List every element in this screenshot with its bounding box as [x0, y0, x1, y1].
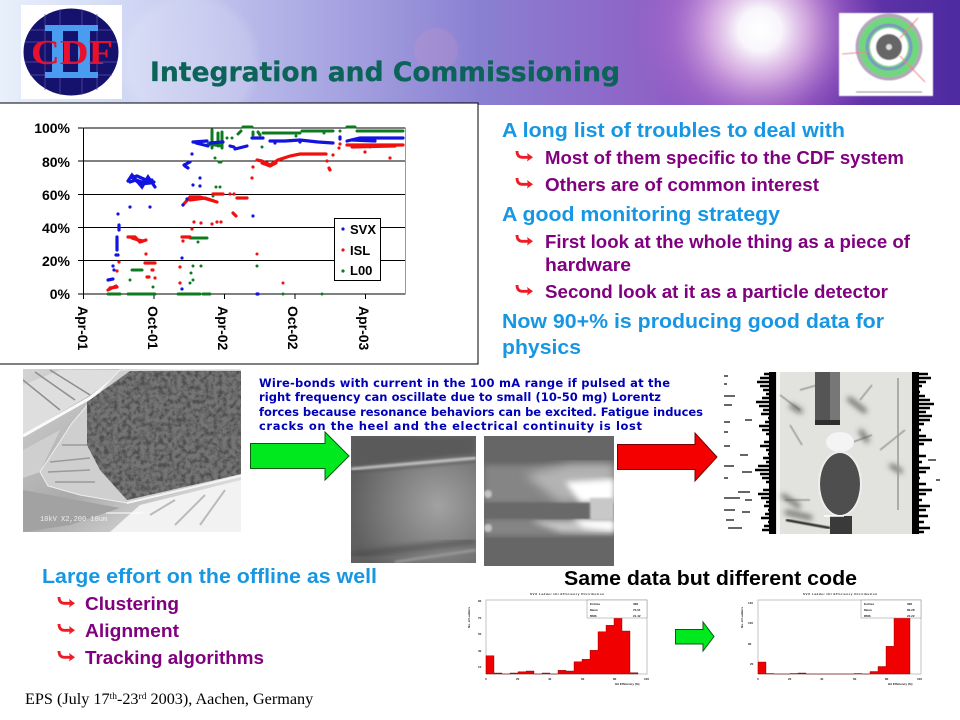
bullet arrow: [59, 597, 75, 608]
data series SVX: [108, 137, 403, 294]
text block: offline effort: Alignment: [85, 621, 179, 641]
detector cross-section image: [839, 13, 933, 96]
y axis labels: 80%: [42, 154, 71, 170]
histogram: before: 90: [478, 599, 482, 603]
photo: wire-bond fracture SEM: 10kV X2,200 10um: [40, 516, 107, 524]
histogram: before: 70: [478, 616, 482, 620]
photo: wire-bond resonating: [484, 436, 614, 566]
logo: CDF II: [21, 5, 122, 99]
histogram: before: 100: [644, 677, 649, 681]
histogram: after: No. of Ladders: [740, 607, 744, 628]
text block: troubles and monitoring: [502, 120, 911, 359]
x axis labels: [75, 306, 372, 351]
bullet arrow: [517, 178, 533, 188]
logo: CDF II: CDF: [31, 33, 113, 72]
histogram: after: [740, 592, 922, 686]
footer: rd: [139, 692, 147, 702]
histogram: before: Hit Efficiency (%): [615, 682, 640, 686]
x axis labels: Apr-03: [356, 306, 372, 351]
histogram: before: 40: [548, 677, 552, 681]
histogram: before: 10: [478, 665, 482, 669]
histogram: after: Entries: [864, 602, 875, 606]
text block: offline effort: Large effort on the offline as well: [42, 566, 377, 588]
y axis labels: 100%: [34, 120, 71, 136]
header banner: [0, 0, 960, 105]
histogram: after: SVX Ladder Hit Efficiency Distribution: [803, 592, 877, 596]
text block: troubles and monitoring: physics: [502, 337, 581, 359]
histogram: before: 60: [581, 677, 585, 681]
text block: troubles and monitoring: A good monitoring strategy: [502, 204, 781, 226]
panel: efficiency chart: [0, 103, 478, 364]
histogram: after: 80: [748, 642, 752, 646]
footer: 2003), Aachen, Germany: [146, 690, 314, 708]
y axis labels: [34, 120, 71, 302]
histogram: after: 100: [917, 677, 922, 681]
histogram: after: 20: [750, 662, 754, 666]
text block: wire-bond explanation: right frequency can oscillate due to small (10-50 mg) Lorentz: [259, 390, 661, 404]
bullet arrow: [517, 285, 533, 296]
data series ISL: [108, 144, 403, 290]
histogram: before: 398: [633, 602, 638, 606]
histogram: after: RMS: [864, 614, 871, 618]
bullet arrow: [517, 151, 533, 162]
x axis labels: Oct-02: [285, 306, 301, 350]
black edge right: [919, 372, 934, 534]
scratches and debris: [780, 380, 905, 500]
text block: offline effort: Clustering: [85, 594, 179, 614]
histogram: before: 80: [613, 677, 617, 681]
histogram: after: Hit Efficiency (%): [888, 682, 913, 686]
histogram: before: SVX Ladder Hit Efficiency Distribution: [530, 592, 604, 596]
photo: failed wire-bond: [724, 372, 944, 534]
histogram: after: 120: [748, 621, 753, 625]
text block: wire-bond explanation: Wire-bonds with current in the 100 mA range if pulsed at the: [259, 376, 670, 390]
x axis labels: Apr-02: [215, 306, 231, 351]
legend: ISL: [350, 243, 370, 258]
bullet arrow: [59, 651, 75, 662]
text block: wire-bond explanation: cracks on the heel and the electrical continuity is lost: [259, 419, 642, 433]
data series ISL outliers: [257, 254, 283, 283]
histogram: before: 30: [478, 649, 482, 653]
histogram: after: 80: [885, 677, 889, 681]
text block: wire-bond explanation: forces because resonance behaviors can be excited. Fatigue induces: [259, 405, 703, 419]
histogram: before: 70.01: [633, 608, 641, 612]
arrow: small green: [676, 622, 714, 651]
histogram: after: 22.22: [907, 614, 915, 618]
bullet arrow: [59, 624, 75, 634]
x axis labels: Apr-01: [75, 306, 91, 351]
text block: wire-bond explanation: [259, 376, 703, 433]
histogram: before: 50: [478, 632, 482, 636]
histogram: before: [467, 592, 649, 686]
text block: troubles and monitoring: Most of them specific to the CDF system: [545, 148, 904, 168]
histogram: before: 21.42: [633, 614, 641, 618]
photo: wire-bond before: [351, 436, 476, 563]
y axis labels: 60%: [42, 187, 71, 203]
histogram: before: Entries: [590, 602, 601, 606]
text block: troubles and monitoring: Now 90+% is producing good data for: [502, 311, 884, 333]
text block: troubles and monitoring: Others are of common interest: [545, 175, 819, 195]
histogram: after: 0: [757, 677, 759, 681]
text block: troubles and monitoring: A long list of troubles to deal with: [502, 120, 845, 142]
y axis labels: 40%: [42, 220, 71, 236]
text block: offline effort: [42, 566, 377, 668]
histogram: after: 398: [907, 602, 912, 606]
title: Integration and Commissioning: [150, 57, 620, 88]
histogram: before: Mean: [590, 608, 598, 612]
histogram: after: 60: [853, 677, 857, 681]
heading: same data: Same data but different code: [564, 568, 857, 590]
histogram: before: RMS: [590, 614, 597, 618]
legend: SVX: [350, 222, 376, 237]
histogram: after: 40: [820, 677, 824, 681]
footer: th: [110, 692, 117, 702]
histogram: after: Mean: [864, 608, 872, 612]
histogram: before: 20: [516, 677, 520, 681]
arrow: green: [250, 432, 349, 480]
footer: EPS (July 17: [25, 690, 110, 708]
histogram: after: 80.28: [907, 608, 915, 612]
histogram: before: 0: [485, 677, 487, 681]
bullet arrow: [517, 235, 533, 246]
histogram: after: 20: [788, 677, 792, 681]
arrow: red: [618, 433, 717, 481]
legend: L00: [350, 263, 372, 278]
text block: offline effort: Tracking algorithms: [85, 648, 264, 668]
x axis labels: Oct-01: [145, 306, 161, 350]
text block: troubles and monitoring: Second look at it as a particle detector: [545, 282, 888, 302]
photo: wire-bond fracture SEM: [23, 369, 241, 532]
text block: troubles and monitoring: hardware: [545, 255, 631, 275]
plot gridlines and frame: [78, 128, 406, 299]
footer: -23: [117, 690, 139, 708]
histogram: before: No. of Ladders: [467, 607, 471, 628]
legend: [334, 218, 380, 280]
text block: troubles and monitoring: First look at the whole thing as a piece of: [545, 232, 911, 252]
histogram: after: 140: [748, 601, 753, 605]
y axis labels: 0%: [50, 286, 71, 302]
black edge left: [755, 372, 769, 532]
y axis labels: 20%: [42, 253, 71, 269]
data series L00: [108, 127, 403, 294]
scattered specks: [724, 376, 944, 528]
